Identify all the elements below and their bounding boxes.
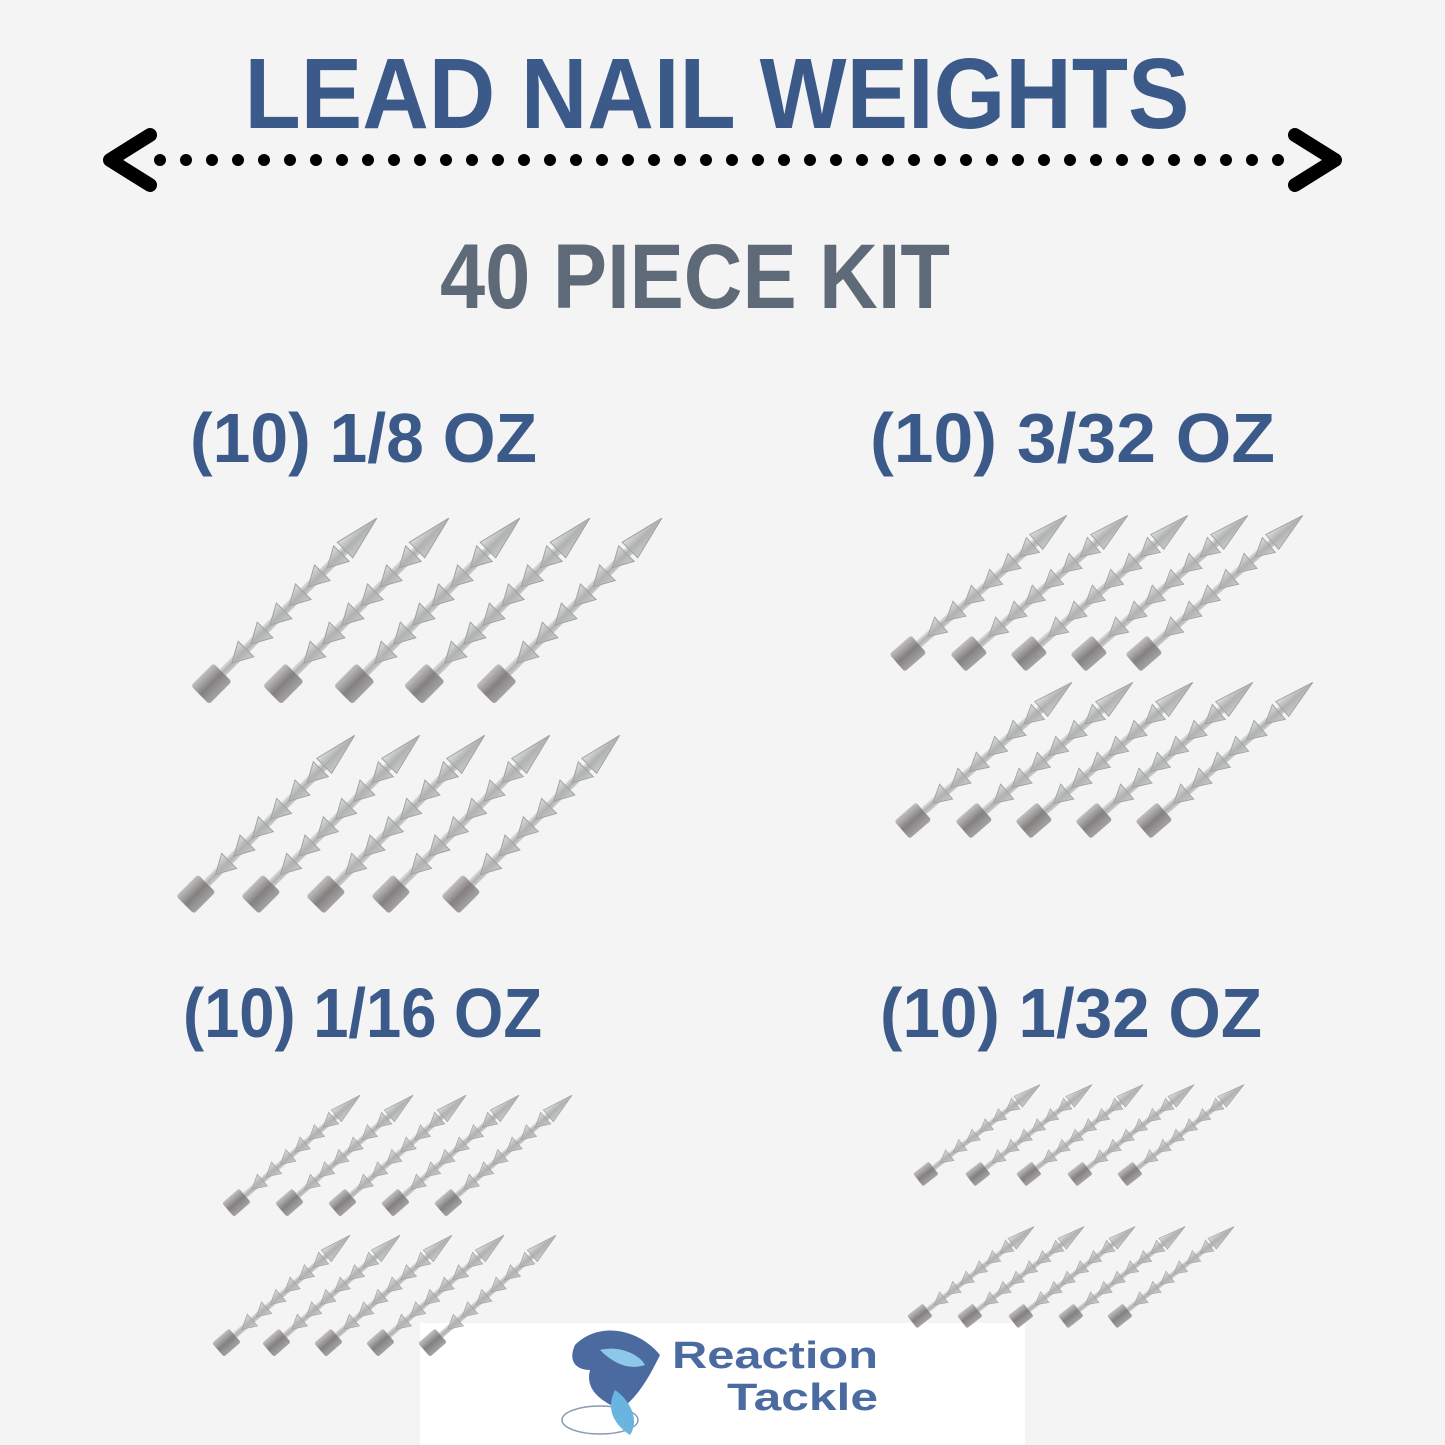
logo panel [420,1323,1025,1445]
nails group: 1/32 oz [907,1078,1249,1328]
heading: 1/16 oz: (10) 1/16 OZ [183,974,542,1052]
nails group: 1/8 oz [176,509,671,914]
heading: 1/8 oz: (10) 1/8 OZ [190,399,537,477]
heading: 3/32 oz: (10) 3/32 OZ [870,399,1275,477]
icon: fish [562,1331,660,1435]
title: LEAD NAIL WEIGHTS [244,38,1190,150]
logo text: Reaction [672,1335,878,1377]
subtitle: 40 PIECE KIT [440,226,950,328]
heading: 1/32 oz: (10) 1/32 OZ [880,974,1262,1052]
nails group: 1/16 oz [212,1088,578,1357]
nails group: 3/32 oz [889,507,1320,839]
logo panel: Tackle [727,1377,878,1419]
arrow: double-headed dotted [110,135,1335,185]
